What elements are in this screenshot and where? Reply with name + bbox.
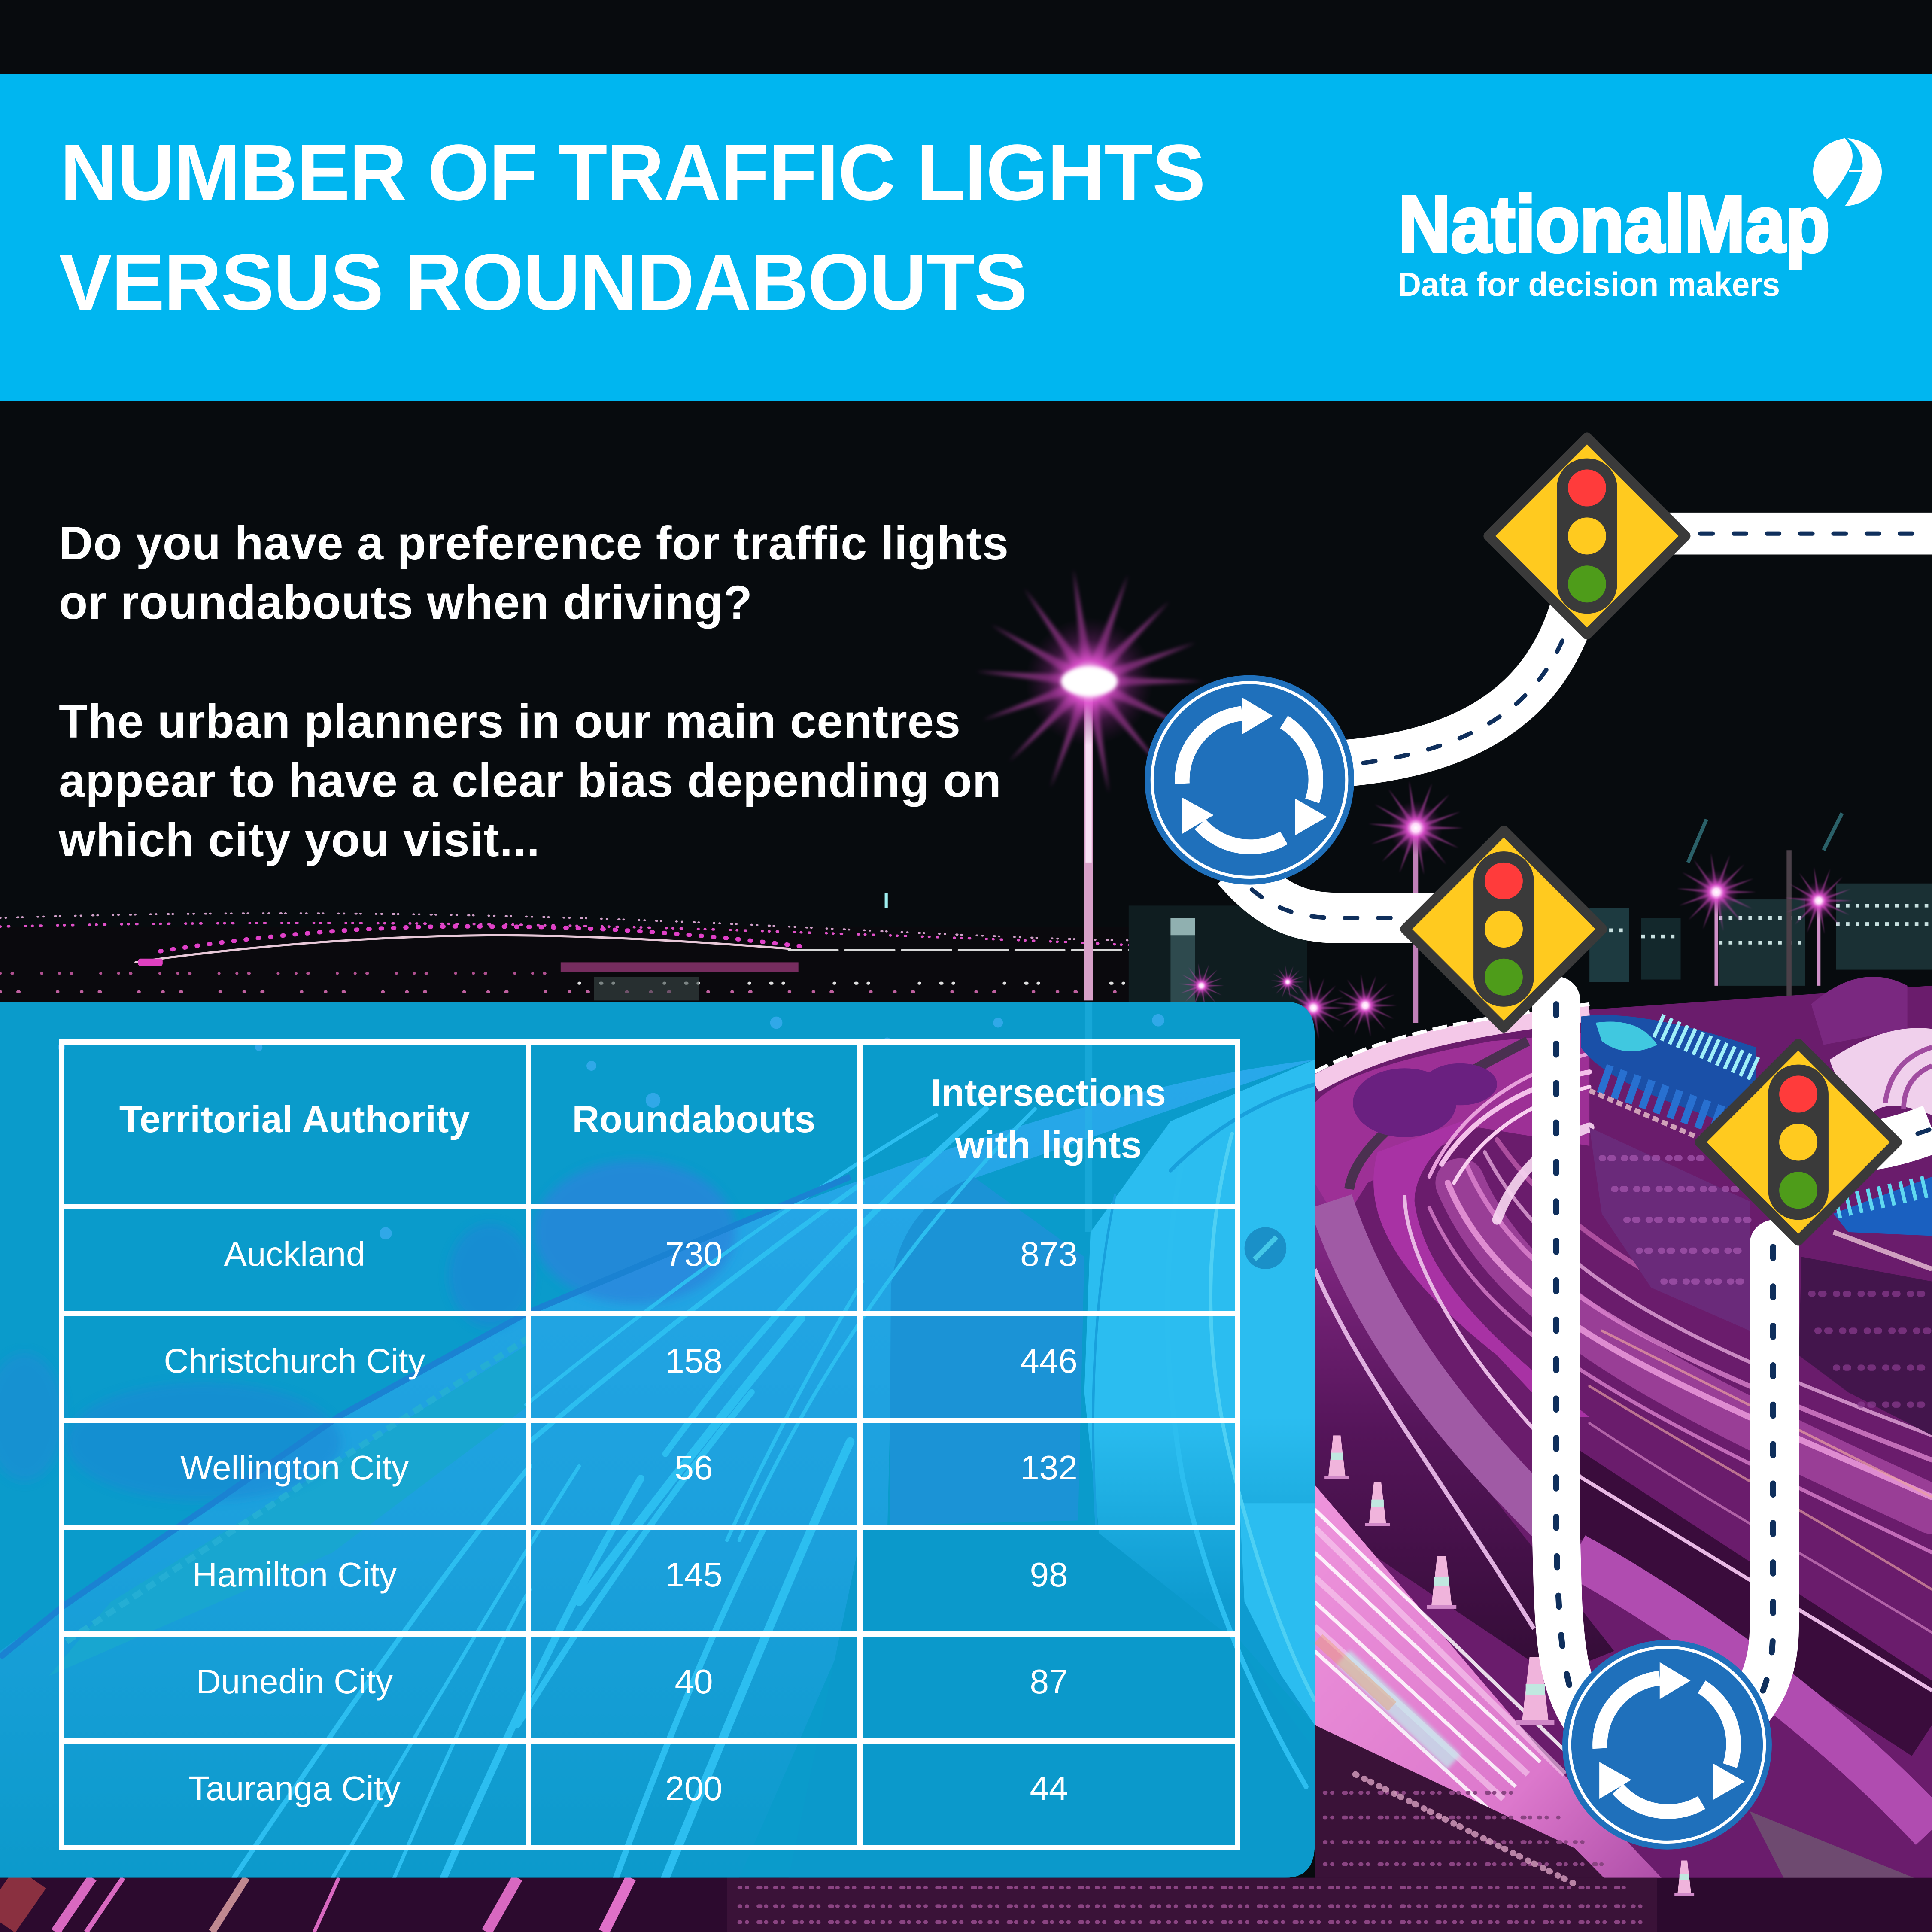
row: Tauranga City: 200 bbox=[665, 1769, 723, 1807]
logo wordmark: NationalMap bbox=[1398, 180, 1830, 269]
icon: traffic light sign right bbox=[1700, 1044, 1897, 1241]
table header row: Intersections bbox=[931, 1071, 1166, 1114]
row: Auckland: 873 bbox=[1020, 1235, 1078, 1273]
distant skyline with harbour bridge bbox=[0, 893, 1232, 1005]
table header row: with lights bbox=[954, 1124, 1142, 1166]
row: Wellington City: 56 bbox=[675, 1449, 713, 1487]
row: Christchurch City: 158 bbox=[665, 1342, 723, 1380]
background: night city photo bbox=[0, 573, 1932, 1932]
row: Hamilton City: 98 bbox=[1030, 1555, 1068, 1594]
intro text: or roundabouts when driving? bbox=[59, 576, 752, 629]
road: first traffic light to roundabout bbox=[1337, 604, 1575, 764]
row: Wellington City: Wellington City bbox=[180, 1449, 409, 1487]
icon: traffic light sign top bbox=[1488, 437, 1686, 635]
intro text: The urban planners in our main centres bbox=[59, 695, 960, 748]
row: Dunedin City bbox=[196, 1662, 1068, 1701]
light trails on the highway bbox=[1429, 1054, 1932, 1633]
row: Dunedin City: Dunedin City bbox=[196, 1662, 393, 1701]
icon: traffic light sign middle bbox=[1405, 830, 1602, 1027]
row: Christchurch City: Christchurch City bbox=[164, 1342, 425, 1380]
data table bbox=[59, 1039, 1240, 1850]
icon: roundabout sign upper bbox=[1145, 675, 1354, 885]
logo: NationalMap bbox=[1398, 138, 1882, 303]
row: Auckland: 730 bbox=[665, 1235, 723, 1273]
row: Wellington City bbox=[180, 1449, 1078, 1487]
table header row bbox=[119, 1071, 1166, 1166]
city buildings bbox=[1129, 813, 1932, 1023]
intro text bbox=[58, 517, 1009, 866]
street lamps with flares bbox=[976, 568, 1853, 1039]
table header row: Territorial Authority bbox=[119, 1098, 470, 1140]
title: NUMBER OF TRAFFIC LIGHTS bbox=[60, 128, 1206, 217]
intro text: Do you have a preference for traffic lights bbox=[59, 517, 1009, 570]
row: Dunedin City: 87 bbox=[1030, 1662, 1068, 1701]
logo emblem bbox=[1813, 138, 1882, 206]
icon: roundabout sign lower bbox=[1562, 1640, 1772, 1850]
row: Christchurch City bbox=[164, 1342, 1078, 1380]
row: Dunedin City: 40 bbox=[675, 1662, 713, 1701]
row: Auckland bbox=[224, 1235, 1078, 1273]
bright trail band lower left bbox=[1315, 1485, 1713, 1932]
traffic cones bbox=[1324, 1435, 1694, 1896]
row: Tauranga City bbox=[188, 1769, 1068, 1807]
header banner bbox=[0, 74, 1932, 401]
row: Hamilton City: 145 bbox=[665, 1555, 723, 1594]
row: Hamilton City bbox=[192, 1555, 1068, 1594]
row: Tauranga City: 44 bbox=[1030, 1769, 1068, 1807]
highway scene: main carriageway bbox=[1315, 986, 1932, 1932]
title: VERSUS ROUNDABOUTS bbox=[59, 238, 1027, 327]
row: Wellington City: 132 bbox=[1020, 1449, 1078, 1487]
road: second traffic light to lower roundabout bbox=[1556, 1000, 1602, 1738]
blue noise barrier and right curve bbox=[1581, 1015, 1932, 1269]
row: Hamilton City: Hamilton City bbox=[192, 1555, 397, 1594]
intro text: which city you visit... bbox=[58, 814, 540, 866]
row: Tauranga City: Tauranga City bbox=[188, 1769, 401, 1807]
row: Auckland: Auckland bbox=[224, 1235, 365, 1273]
row: Christchurch City: 446 bbox=[1020, 1342, 1078, 1380]
road: third traffic light to right edge bbox=[1836, 1129, 1932, 1148]
table grid bbox=[59, 1039, 1240, 1850]
logo tagline: Data for decision makers bbox=[1398, 265, 1780, 303]
roadside foliage bbox=[0, 977, 1932, 1932]
table header row: Roundabouts bbox=[572, 1098, 816, 1140]
road route with signs bbox=[1145, 437, 1932, 1850]
road: third traffic light to lower roundabout bbox=[1725, 1245, 1774, 1731]
translucent blue table panel bbox=[0, 1002, 1315, 1878]
road: right edge to first traffic light bbox=[1587, 526, 1932, 541]
title bbox=[59, 128, 1206, 327]
road: roundabout to second traffic light bbox=[1237, 867, 1442, 918]
intro text: appear to have a clear bias depending on bbox=[59, 754, 1001, 807]
